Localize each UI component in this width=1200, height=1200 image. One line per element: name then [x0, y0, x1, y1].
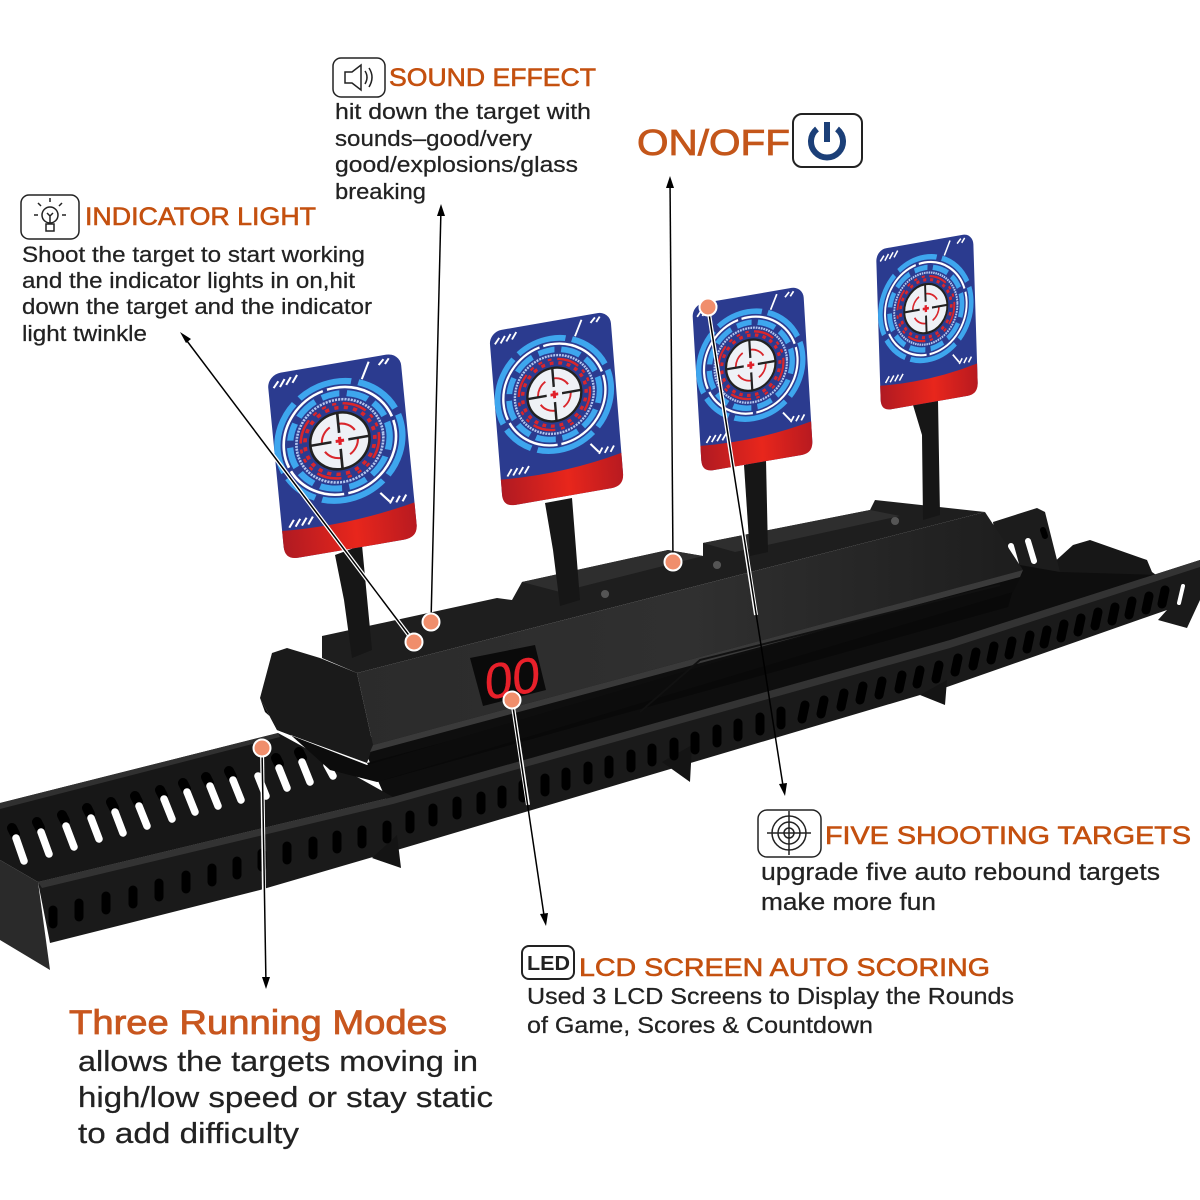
text: LCD description: of Game, Scores & Countdown — [527, 1012, 873, 1038]
far rail end — [993, 508, 1170, 625]
target 2 — [489, 311, 624, 507]
arrow: five shooting targets — [700, 298, 787, 796]
text: three running modes description: to add difficulty — [78, 1118, 300, 1150]
front rail — [38, 560, 1200, 943]
icon: bullseye — [758, 810, 821, 857]
arrow: indicator light — [180, 332, 422, 650]
text: LCD description — [527, 983, 1014, 1038]
callout: on/off — [637, 114, 862, 167]
text: indicator light description — [22, 242, 372, 346]
heading: on/off: ON/OFF — [637, 122, 790, 163]
text: sound effect description: good/explosions/glass — [335, 152, 578, 177]
text: indicator light description: Shoot the target to start working — [22, 242, 365, 267]
target 3 — [692, 286, 813, 472]
heading: five shooting targets: FIVE SHOOTING TARGETS — [825, 822, 1191, 850]
heading: indicator light: INDICATOR LIGHT — [85, 203, 316, 231]
text: three running modes description: allows the targets moving in — [78, 1046, 478, 1078]
heading: three running modes: Three Running Modes — [69, 1004, 447, 1042]
text: LCD description: Used 3 LCD Screens to Display the Rounds — [527, 983, 1014, 1009]
callout: indicator light — [21, 195, 372, 346]
icon: power button — [793, 114, 862, 167]
text: five shooting targets description — [761, 859, 1160, 916]
icon: speaker — [333, 58, 385, 97]
left rail end — [0, 860, 50, 970]
text: indicator light description: light twinkle — [22, 321, 147, 346]
icon: LED — [522, 946, 574, 979]
target posts — [335, 400, 940, 658]
text: indicator light description: and the indicator lights in on,hit — [22, 268, 355, 293]
text: sound effect description — [335, 99, 591, 204]
callout: LCD screen auto scoring — [522, 946, 1014, 1038]
target 1 — [267, 352, 418, 560]
text: sound effect description: hit down the target with — [335, 99, 591, 124]
arrow: sound effect — [422, 204, 445, 630]
callout: sound effect — [333, 58, 596, 204]
back rail wall — [0, 733, 393, 882]
callout: five shooting targets — [758, 810, 1191, 916]
heading: LCD screen auto scoring: LCD SCREEN AUTO SCORING — [579, 954, 990, 982]
arrow: three running modes — [254, 740, 270, 989]
product: target machine with rails — [0, 233, 1200, 970]
machine body — [260, 500, 1023, 782]
callout: three running modes — [69, 1004, 493, 1150]
target 4 — [876, 233, 978, 411]
LED score display: 00 — [485, 645, 540, 711]
text: sound effect description: breaking — [335, 179, 426, 204]
icon: light bulb — [21, 195, 79, 239]
text: indicator light description: down the target and the indicator — [22, 294, 372, 319]
icon: LED: LED — [527, 953, 570, 975]
text: three running modes description: high/low speed or stay static — [78, 1082, 493, 1114]
heading: sound effect: SOUND EFFECT — [389, 64, 596, 92]
text: five shooting targets description: make more fun — [761, 889, 936, 916]
text: sound effect description: sounds–good/very — [335, 126, 532, 151]
text: three running modes description — [78, 1046, 493, 1150]
text: five shooting targets description: upgrade five auto rebound targets — [761, 859, 1160, 886]
screws — [413, 521, 895, 645]
arrow: LCD screen — [504, 692, 548, 926]
trough between body and front rail — [360, 565, 1160, 815]
arrow: on/off — [664, 176, 682, 570]
